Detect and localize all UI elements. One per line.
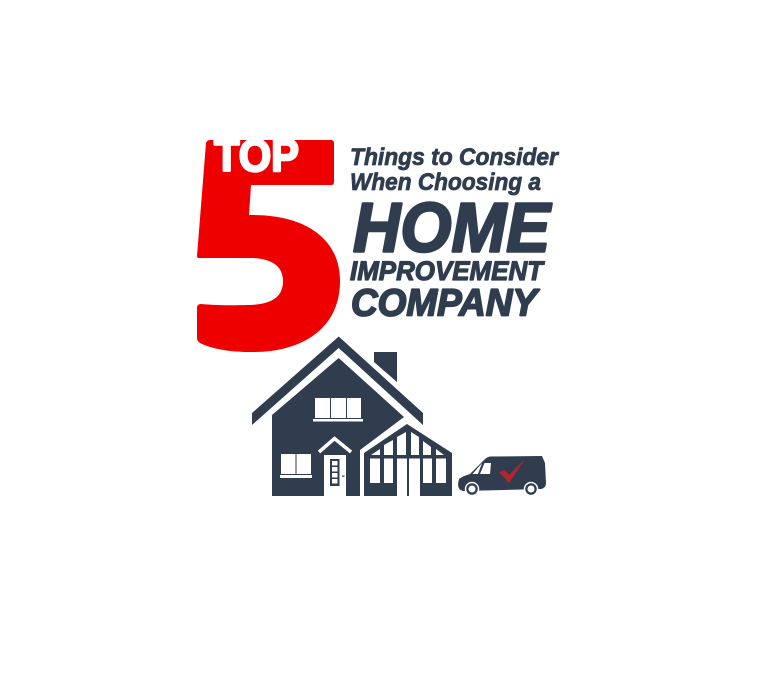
lower window bbox=[280, 454, 312, 478]
van body bbox=[458, 456, 546, 491]
front wheel bbox=[466, 482, 478, 496]
heading: IMPROVEMENT: IMPROVEMENT bbox=[350, 256, 545, 286]
big red number 5 bbox=[197, 140, 340, 352]
upper window bbox=[313, 398, 363, 422]
conservatory bbox=[364, 424, 452, 496]
heading: COMPANY: COMPANY bbox=[351, 282, 541, 324]
heading: When Choosing a: When Choosing a bbox=[350, 169, 541, 196]
icon: house bbox=[252, 336, 452, 496]
heading: HOME: HOME bbox=[353, 188, 552, 266]
porch bbox=[319, 438, 351, 452]
roof bbox=[252, 336, 423, 425]
icon: van bbox=[458, 456, 546, 496]
word: TOP: TOP bbox=[214, 130, 299, 181]
red check mark bbox=[499, 459, 525, 483]
van windows bbox=[472, 463, 491, 474]
house body bbox=[272, 358, 404, 496]
door bbox=[324, 455, 346, 496]
chimney bbox=[374, 352, 397, 382]
rear wheel bbox=[524, 482, 538, 496]
heading: Things to Consider: Things to Consider bbox=[350, 144, 559, 171]
